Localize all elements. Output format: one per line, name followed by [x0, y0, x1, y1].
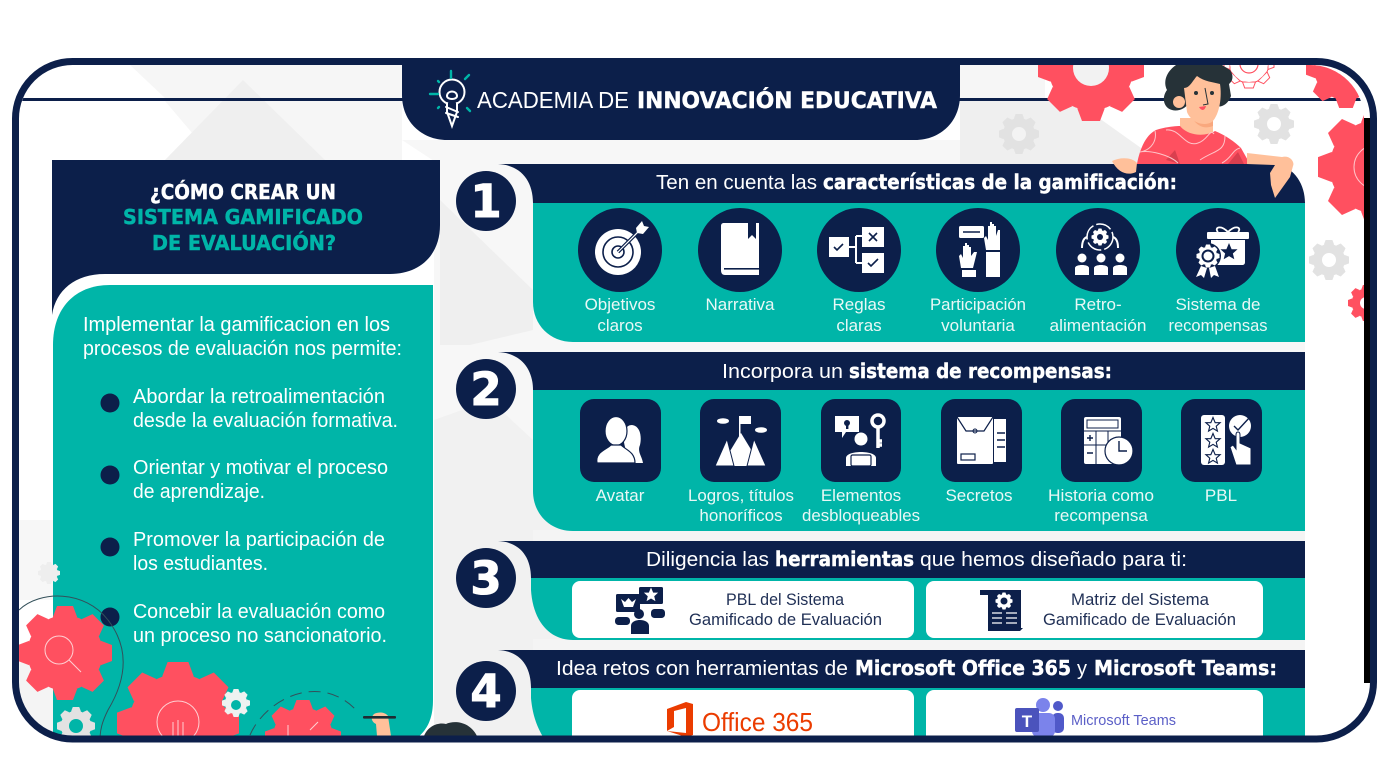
- icon: narrativa: [698, 208, 782, 314]
- card: PBL del sistema: Gamificado de Evaluación: [689, 611, 882, 629]
- icon: matrix scroll: [980, 590, 1023, 631]
- number 3: [456, 548, 516, 608]
- icon: retroalimentación: [1050, 208, 1146, 335]
- decorative gears top right: [999, 65, 1364, 321]
- number 4: 4: [470, 665, 502, 718]
- illustration: gears bottom left: [19, 562, 477, 736]
- panel: step 3 teal: [531, 577, 1305, 640]
- icon: elementos desbloqueables: desbloqueables: [802, 506, 920, 525]
- heading: step 1: características de la gamificación:: [823, 170, 1177, 194]
- panel: step 2 teal: [533, 389, 1305, 531]
- card: PBL del sistema: PBL del Sistema: [726, 591, 845, 609]
- card: Office 365: [572, 690, 914, 750]
- icon: objetivos claros: [578, 208, 662, 335]
- bullet: no sancionatorio: Concebir la evaluación como: [133, 601, 385, 623]
- number 1: 1: [470, 175, 502, 228]
- card: PBL del sistema: [572, 581, 914, 638]
- panel: left title: [52, 160, 440, 315]
- card: matriz del sistema: Gamificado de Evaluación: [1043, 611, 1236, 629]
- heading: step 1: Ten en cuenta las: [656, 172, 817, 194]
- number 2: 2: [470, 363, 502, 416]
- number 2: [456, 359, 516, 419]
- heading: step 4: Idea retos con herramientas de: [556, 658, 848, 680]
- icon: lightbulb logo: [430, 71, 470, 126]
- icon: logros: Logros, títulos: [688, 486, 794, 505]
- step 2: [456, 352, 1305, 531]
- panel: left title: DE EVALUACIÓN?: [152, 231, 336, 255]
- icon: logros: honoríficos: [699, 506, 783, 525]
- panel: left teal benefits: procesos de evaluación nos permite:: [83, 338, 402, 360]
- icon: secretos: [941, 399, 1022, 505]
- heading: step 4: Microsoft Office 365: [855, 656, 1071, 680]
- icon: sistema de recompensas: [1168, 208, 1268, 335]
- panel: step 4 teal: [531, 686, 1305, 740]
- heading: step 3: [498, 541, 1305, 578]
- icon: sistema de recompensas: Sistema de: [1175, 295, 1261, 314]
- step 4: [456, 650, 1305, 750]
- heading: step 2: Incorpora un: [722, 361, 843, 383]
- panel: left teal benefits: [53, 285, 433, 745]
- heading: step 2: [498, 352, 1305, 390]
- bullet: participación: los estudiantes.: [133, 553, 268, 575]
- icon: objetivos claros: claros: [597, 316, 643, 335]
- icon: participación voluntaria: voluntaria: [941, 316, 1015, 335]
- heading: step 4: [498, 650, 1305, 688]
- card: matriz del sistema: Matriz del Sistema: [1071, 591, 1210, 609]
- step 3: [456, 541, 1305, 640]
- heading: step 3: herramientas: [775, 547, 914, 571]
- icon: reglas claras: [817, 208, 901, 335]
- icon: reglas claras: Reglas: [833, 295, 885, 314]
- card: matriz del sistema: [926, 581, 1263, 638]
- icon: Office logo: [667, 702, 693, 737]
- icon: secretos: Secretos: [945, 486, 1013, 505]
- heading: step 2: sistema de recompensas:: [849, 359, 1112, 383]
- icon: objetivos claros: Objetivos: [585, 295, 655, 314]
- number 1: [456, 171, 516, 231]
- number 3: 3: [470, 552, 502, 605]
- step 1: [456, 164, 1305, 342]
- bullet: participación: Promover la participación de: [133, 529, 385, 551]
- icon: elementos desbloqueables: [802, 399, 920, 525]
- header tab: [402, 60, 960, 140]
- icon: logros: [688, 399, 794, 525]
- heading: step 1: [498, 164, 1305, 203]
- heading: step 3: que hemos diseñado para ti:: [920, 549, 1187, 571]
- bullet: motivar: Orientar y motivar el proceso: [133, 457, 388, 479]
- icon: participación voluntaria: [930, 208, 1026, 335]
- card: Microsoft Teams: Microsoft Teams: [1071, 712, 1176, 729]
- panel: left title: SISTEMA GAMIFICADO: [123, 205, 363, 229]
- bullet: no sancionatorio: un proceso no sancionatorio.: [133, 625, 387, 647]
- icon: sistema de recompensas: recompensas: [1168, 316, 1268, 335]
- icon: PBL person: [615, 587, 665, 634]
- icon: elementos desbloqueables: Elementos: [821, 486, 901, 505]
- icon: retroalimentación: alimentación: [1050, 316, 1146, 335]
- bullet: no sancionatorio: [100, 601, 387, 647]
- bullet: participación: [100, 530, 384, 570]
- bullet: motivar: de aprendizaje.: [133, 481, 265, 503]
- panel: left teal benefits: Implementar la gamificacion en los: [83, 314, 390, 336]
- icon: avatar: [580, 399, 661, 505]
- icon: Teams logo: [1015, 698, 1064, 737]
- card: Microsoft Teams: [926, 690, 1263, 750]
- header tab: ACADEMIA DE: [477, 87, 629, 113]
- icon: historia como recompensa: recompensa: [1054, 506, 1148, 525]
- icon: PBL: PBL: [1205, 486, 1237, 505]
- panel: step 1 teal: [533, 202, 1305, 342]
- icon: avatar: Avatar: [596, 486, 645, 505]
- icon: historia como recompensa: [1048, 399, 1154, 525]
- icon: Teams logo: T: [1022, 712, 1033, 731]
- card: Office 365: Office 365: [702, 707, 813, 737]
- icon: participación voluntaria: Participación: [930, 295, 1026, 314]
- icon: retroalimentación: Retro-: [1074, 295, 1122, 314]
- icon: narrativa: Narrativa: [706, 295, 775, 314]
- bullet: retroalimentación: Abordar la retroalimentación: [133, 386, 385, 408]
- icon: historia como recompensa: Historia como: [1048, 486, 1154, 505]
- heading: step 3: Diligencia las: [646, 549, 769, 571]
- icon: reglas claras: claras: [836, 316, 882, 335]
- heading: step 4: y: [1077, 658, 1087, 680]
- bullet: retroalimentación: desde la evaluación formativa.: [133, 410, 398, 432]
- heading: step 4: Microsoft Teams:: [1094, 656, 1277, 680]
- illustration: character leaning on step 1: [1112, 65, 1293, 198]
- bullet: retroalimentación: [100, 388, 396, 427]
- panel: left title: ¿CÓMO CREAR UN: [150, 180, 336, 204]
- header rule: [19, 98, 1364, 101]
- icon: PBL: [1181, 399, 1262, 505]
- number 4: [456, 661, 516, 721]
- header tab: INNOVACIÓN EDUCATIVA: [637, 88, 937, 114]
- bullet: motivar: [100, 457, 388, 503]
